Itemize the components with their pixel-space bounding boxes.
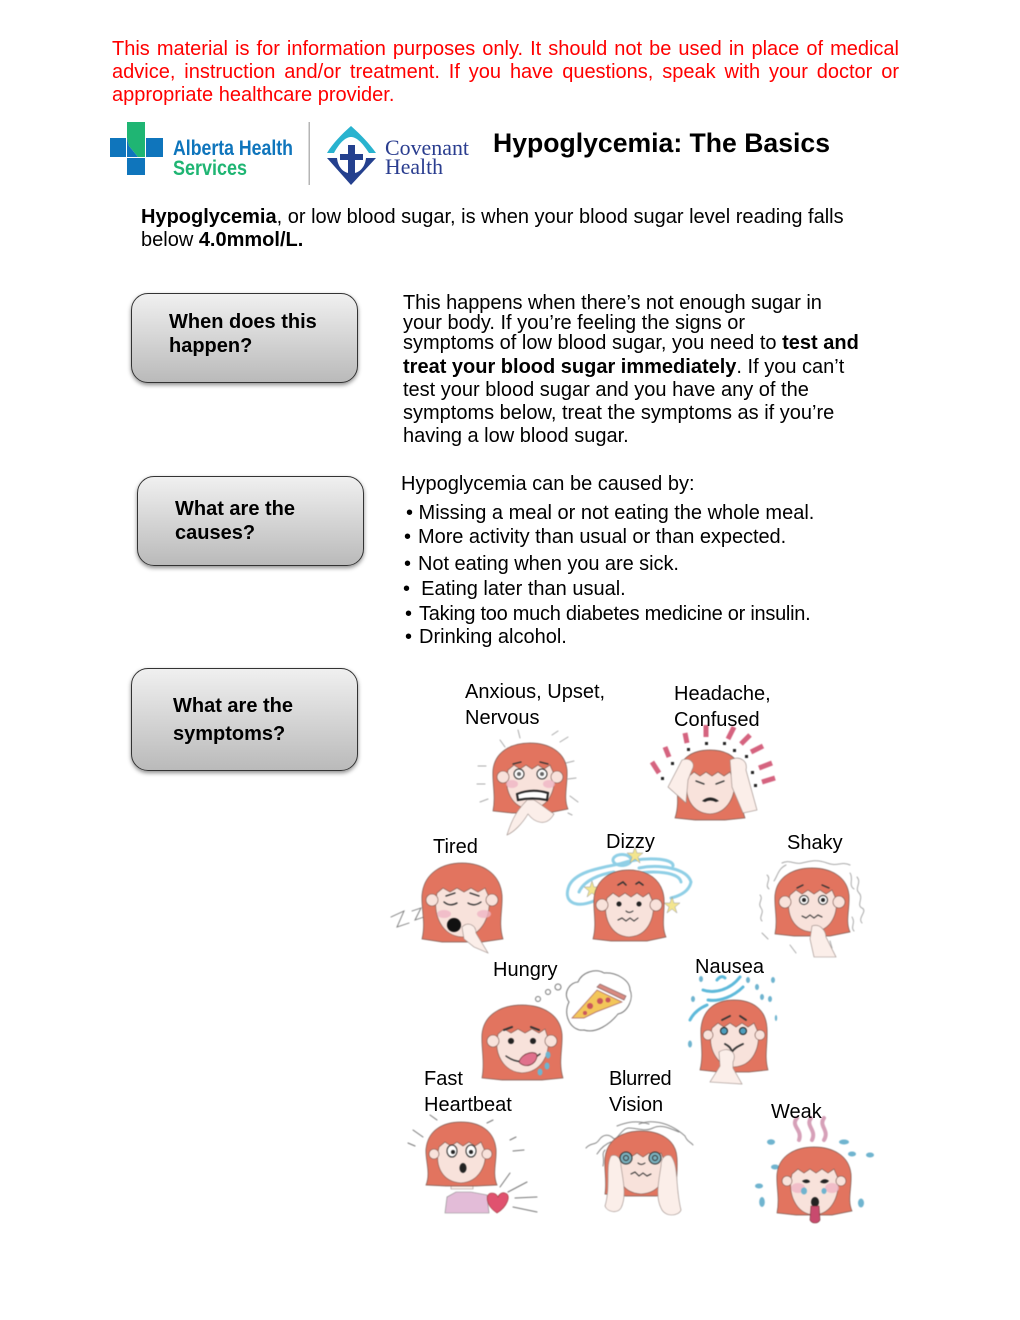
label: tired: Tired: [433, 836, 478, 858]
label: anxious: [465, 681, 605, 729]
button: when does this happen: [131, 293, 358, 383]
label: anxious: Nervous: [465, 707, 539, 729]
icon: fast heartbeat face: [408, 1115, 537, 1213]
icon: headache face: [652, 725, 775, 820]
text: causes list: [401, 473, 814, 648]
button: what are the symptoms: symptoms?: [173, 723, 285, 745]
label: fast heartbeat: [424, 1068, 512, 1116]
logo: Covenant Health: Covenant: [385, 135, 469, 160]
disclaimer: This material is for information purposes only. It should not be used in place of medical: [112, 38, 899, 60]
button: when does this happen: happen?: [169, 335, 252, 357]
text: when does this happen: [403, 292, 859, 447]
button: what are the causes: What are the: [175, 498, 295, 520]
intro definition: [141, 206, 844, 251]
text: causes list: • Taking too much diabetes medicine or insulin.: [405, 603, 810, 625]
label: blurred vision: Vision: [609, 1094, 663, 1116]
text: causes list: • Drinking alcohol.: [405, 626, 567, 648]
disclaimer: advice, instruction and/or treatment. If you have questions, speak with your doctor or: [112, 61, 899, 83]
icon: hungry face: [482, 984, 563, 1080]
icon: pizza thought bubble: [566, 971, 631, 1031]
logo: Covenant Health: [327, 126, 469, 185]
icon: weak face: [755, 1118, 874, 1223]
button: when does this happen: When does this: [169, 311, 317, 333]
title: Hypoglycemia: The Basics: [493, 128, 830, 158]
intro definition: below 4.0mmol/L.: [141, 229, 303, 251]
label: anxious: Anxious, Upset,: [465, 681, 605, 703]
logo: Alberta Health Services: [110, 122, 293, 180]
logos: [110, 122, 469, 185]
label: nausea: Nausea: [695, 956, 764, 978]
label: headache: Confused: [674, 709, 760, 731]
text: when does this happen: treat your blood sugar immediately. If you can’t: [403, 356, 844, 378]
button: what are the causes: [137, 476, 364, 566]
text: when does this happen: test your blood sugar and you have any of the: [403, 379, 809, 401]
text: causes list: • Eating later than usual.: [403, 578, 626, 600]
icon: shaky face: [760, 861, 864, 957]
label: weak: Weak: [771, 1101, 822, 1123]
label: blurred vision: [609, 1068, 671, 1116]
icon: anxious face: [477, 730, 578, 835]
disclaimer: [112, 38, 899, 106]
logo: Alberta Health Services: Services: [173, 157, 247, 180]
text: causes list: • Not eating when you are sick.: [404, 553, 679, 575]
button: what are the symptoms: What are the: [173, 695, 293, 717]
icon: blurred vision face: [586, 1122, 693, 1215]
button: what are the symptoms: [131, 668, 358, 771]
label: headache: Headache,: [674, 683, 771, 705]
intro definition: Hypoglycemia, or low blood sugar, is when your blood sugar level reading falls: [141, 206, 844, 228]
icon: nausea face: [688, 976, 777, 1084]
text: when does this happen: This happens when there’s not enough sugar in: [403, 292, 822, 314]
label: blurred vision: Blurred: [609, 1068, 671, 1090]
text: when does this happen: having a low blood sugar.: [403, 425, 629, 447]
label: fast heartbeat: Heartbeat: [424, 1094, 512, 1116]
logo: Alberta Health Services: Alberta Health: [173, 137, 293, 160]
label: fast heartbeat: Fast: [424, 1068, 463, 1090]
label: dizzy: Dizzy: [606, 831, 655, 853]
text: when does this happen: symptoms below, treat the symptoms as if you’re: [403, 402, 834, 424]
text: causes list: • More activity than usual or than expected.: [404, 526, 786, 548]
icon: dizzy face: [567, 847, 691, 941]
text: causes list: • Missing a meal or not eating the whole meal.: [406, 502, 814, 524]
logo: Covenant Health: Health: [385, 154, 443, 179]
label: hungry: Hungry: [493, 959, 557, 981]
text: when does this happen: your body. If you’re feeling the signs or: [403, 312, 745, 334]
text: causes list: Hypoglycemia can be caused by:: [401, 473, 694, 495]
label: shaky: Shaky: [787, 832, 843, 854]
text: when does this happen: symptoms of low blood sugar, you need to test and: [403, 332, 859, 354]
label: headache: [674, 683, 771, 731]
icon: tired face: [391, 863, 503, 953]
disclaimer: appropriate healthcare provider.: [112, 84, 394, 106]
button: what are the causes: causes?: [175, 522, 255, 544]
symptom labels: [424, 681, 843, 1123]
